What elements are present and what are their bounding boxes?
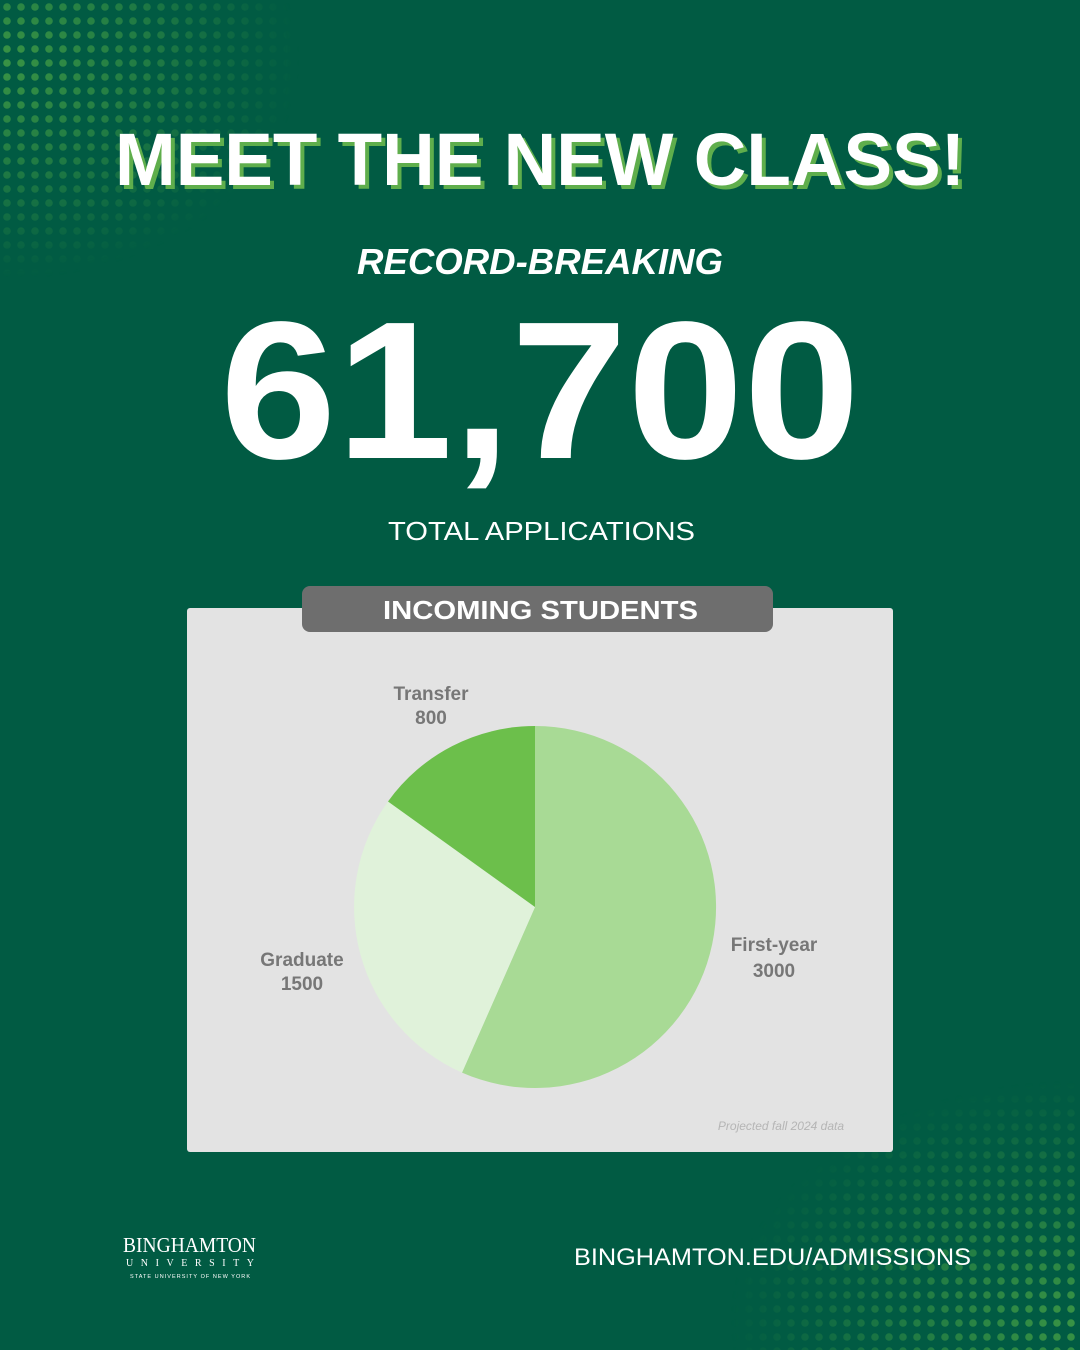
labels: 1500 [281,974,323,995]
pie chart [354,726,716,1088]
logo: BINGHAMTON [123,1233,256,1257]
big number: 61,700 [220,281,860,500]
footnote: Projected fall 2024 data [718,1119,844,1133]
url: BINGHAMTON.EDU/ADMISSIONS [574,1244,971,1271]
title: MEET THE NEW CLASS! [119,122,969,205]
caption: TOTAL APPLICATIONS [388,516,695,546]
labels: 3000 [753,961,795,982]
labels [260,684,818,995]
subtitle: RECORD-BREAKING [357,241,723,282]
labels: Transfer [394,684,469,705]
logo [123,1233,256,1280]
title: MEET THE NEW CLASS! [115,118,965,201]
tab heading: INCOMING STUDENTS [383,595,698,625]
labels: First-year [731,935,818,956]
labels: 800 [415,708,447,729]
logo: UNIVERSITY [126,1258,254,1269]
panel: incoming students [187,586,893,1152]
labels: Graduate [260,950,344,971]
logo: STATE UNIVERSITY OF NEW YORK [130,1274,250,1280]
tab heading [302,586,773,632]
